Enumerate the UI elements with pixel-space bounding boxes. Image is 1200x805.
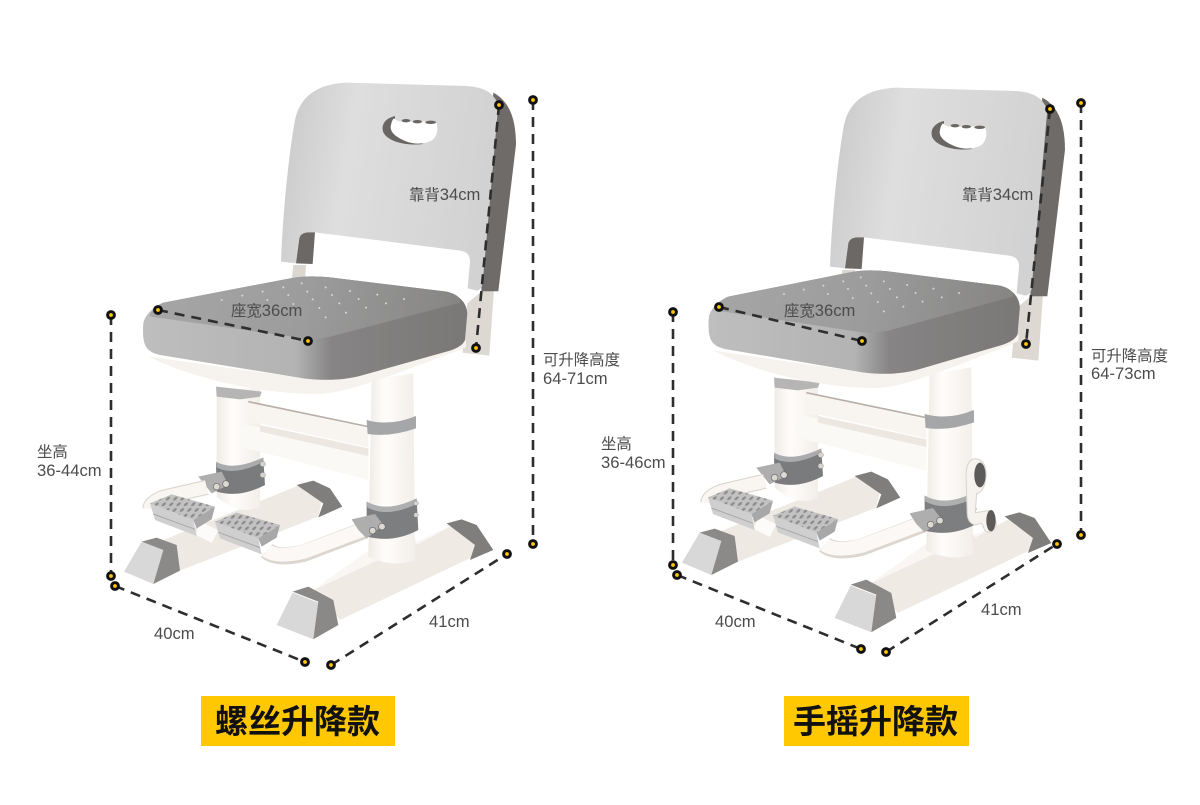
hand crank: [966, 459, 996, 532]
front post and foot pedals: [708, 367, 976, 557]
backrest: [281, 83, 516, 356]
label: width, screw model: 40cm: [154, 624, 195, 643]
dimension: backrest: [1023, 106, 1053, 347]
title badge: hand crank lift model: [784, 696, 969, 746]
label: lift height, crank model: 可升降高度: [1091, 347, 1168, 365]
rear leg and foot bars: [124, 387, 368, 584]
label: width, crank model: 40cm: [715, 612, 756, 631]
chair: hand crank lift model: [682, 88, 1065, 632]
dimension: seat height: [108, 312, 114, 579]
dimension: seat height: [670, 309, 676, 568]
label: seat width, screw model: 座宽36cm: [231, 301, 302, 320]
dimensions: hand crank lift model: [670, 100, 1084, 655]
label: seat height, screw model: 36-44cm: [37, 461, 102, 480]
label: depth, crank model: 41cm: [981, 600, 1022, 619]
dimension: overall height: [1078, 100, 1084, 538]
dimension: backrest: [473, 102, 502, 351]
label: depth, screw model: 41cm: [429, 612, 470, 631]
dimension: 40cm width: [674, 572, 864, 652]
title badge: hand crank lift model: 手摇升降款: [793, 703, 958, 740]
seat cushion: [143, 276, 467, 394]
front foot bar: [277, 519, 493, 639]
dimension: seat width: [716, 304, 865, 344]
dimension: 41cm depth: [328, 551, 510, 668]
backrest: [830, 88, 1065, 361]
label: seat height, crank model: [601, 435, 666, 472]
dimensions: screw lift model: [108, 97, 536, 668]
label: seat height, crank model: 36-46cm: [601, 453, 666, 472]
label: lift height, screw model: [543, 351, 620, 388]
title badge: screw lift model: [201, 696, 395, 746]
dimension: 40cm width: [112, 583, 308, 665]
chair: screw lift model: [124, 83, 516, 639]
label: backrest, screw model: 靠背34cm: [409, 185, 480, 204]
dimension: seat width: [155, 307, 311, 344]
dimension: 41cm depth: [883, 541, 1060, 655]
seat cushion: [709, 270, 1020, 388]
label: lift height, screw model: 可升降高度: [543, 351, 620, 369]
label: seat width, crank model: 座宽36cm: [784, 301, 855, 320]
label: backrest, crank model: 靠背34cm: [962, 185, 1033, 204]
label: seat height, screw model: 坐高: [37, 443, 68, 461]
label: lift height, screw model: 64-71cm: [543, 369, 608, 388]
label: seat height, crank model: 坐高: [601, 435, 632, 453]
front post and foot pedals: [150, 373, 418, 563]
title badge: screw lift model: 螺丝升降款: [215, 703, 380, 740]
front foot bar: [835, 512, 1051, 632]
dimension: overall height: [530, 97, 536, 547]
label: lift height, crank model: 64-73cm: [1091, 364, 1156, 383]
label: seat height, screw model: [37, 443, 102, 480]
rear leg and foot bars: [682, 378, 926, 575]
label: lift height, crank model: [1091, 347, 1168, 383]
